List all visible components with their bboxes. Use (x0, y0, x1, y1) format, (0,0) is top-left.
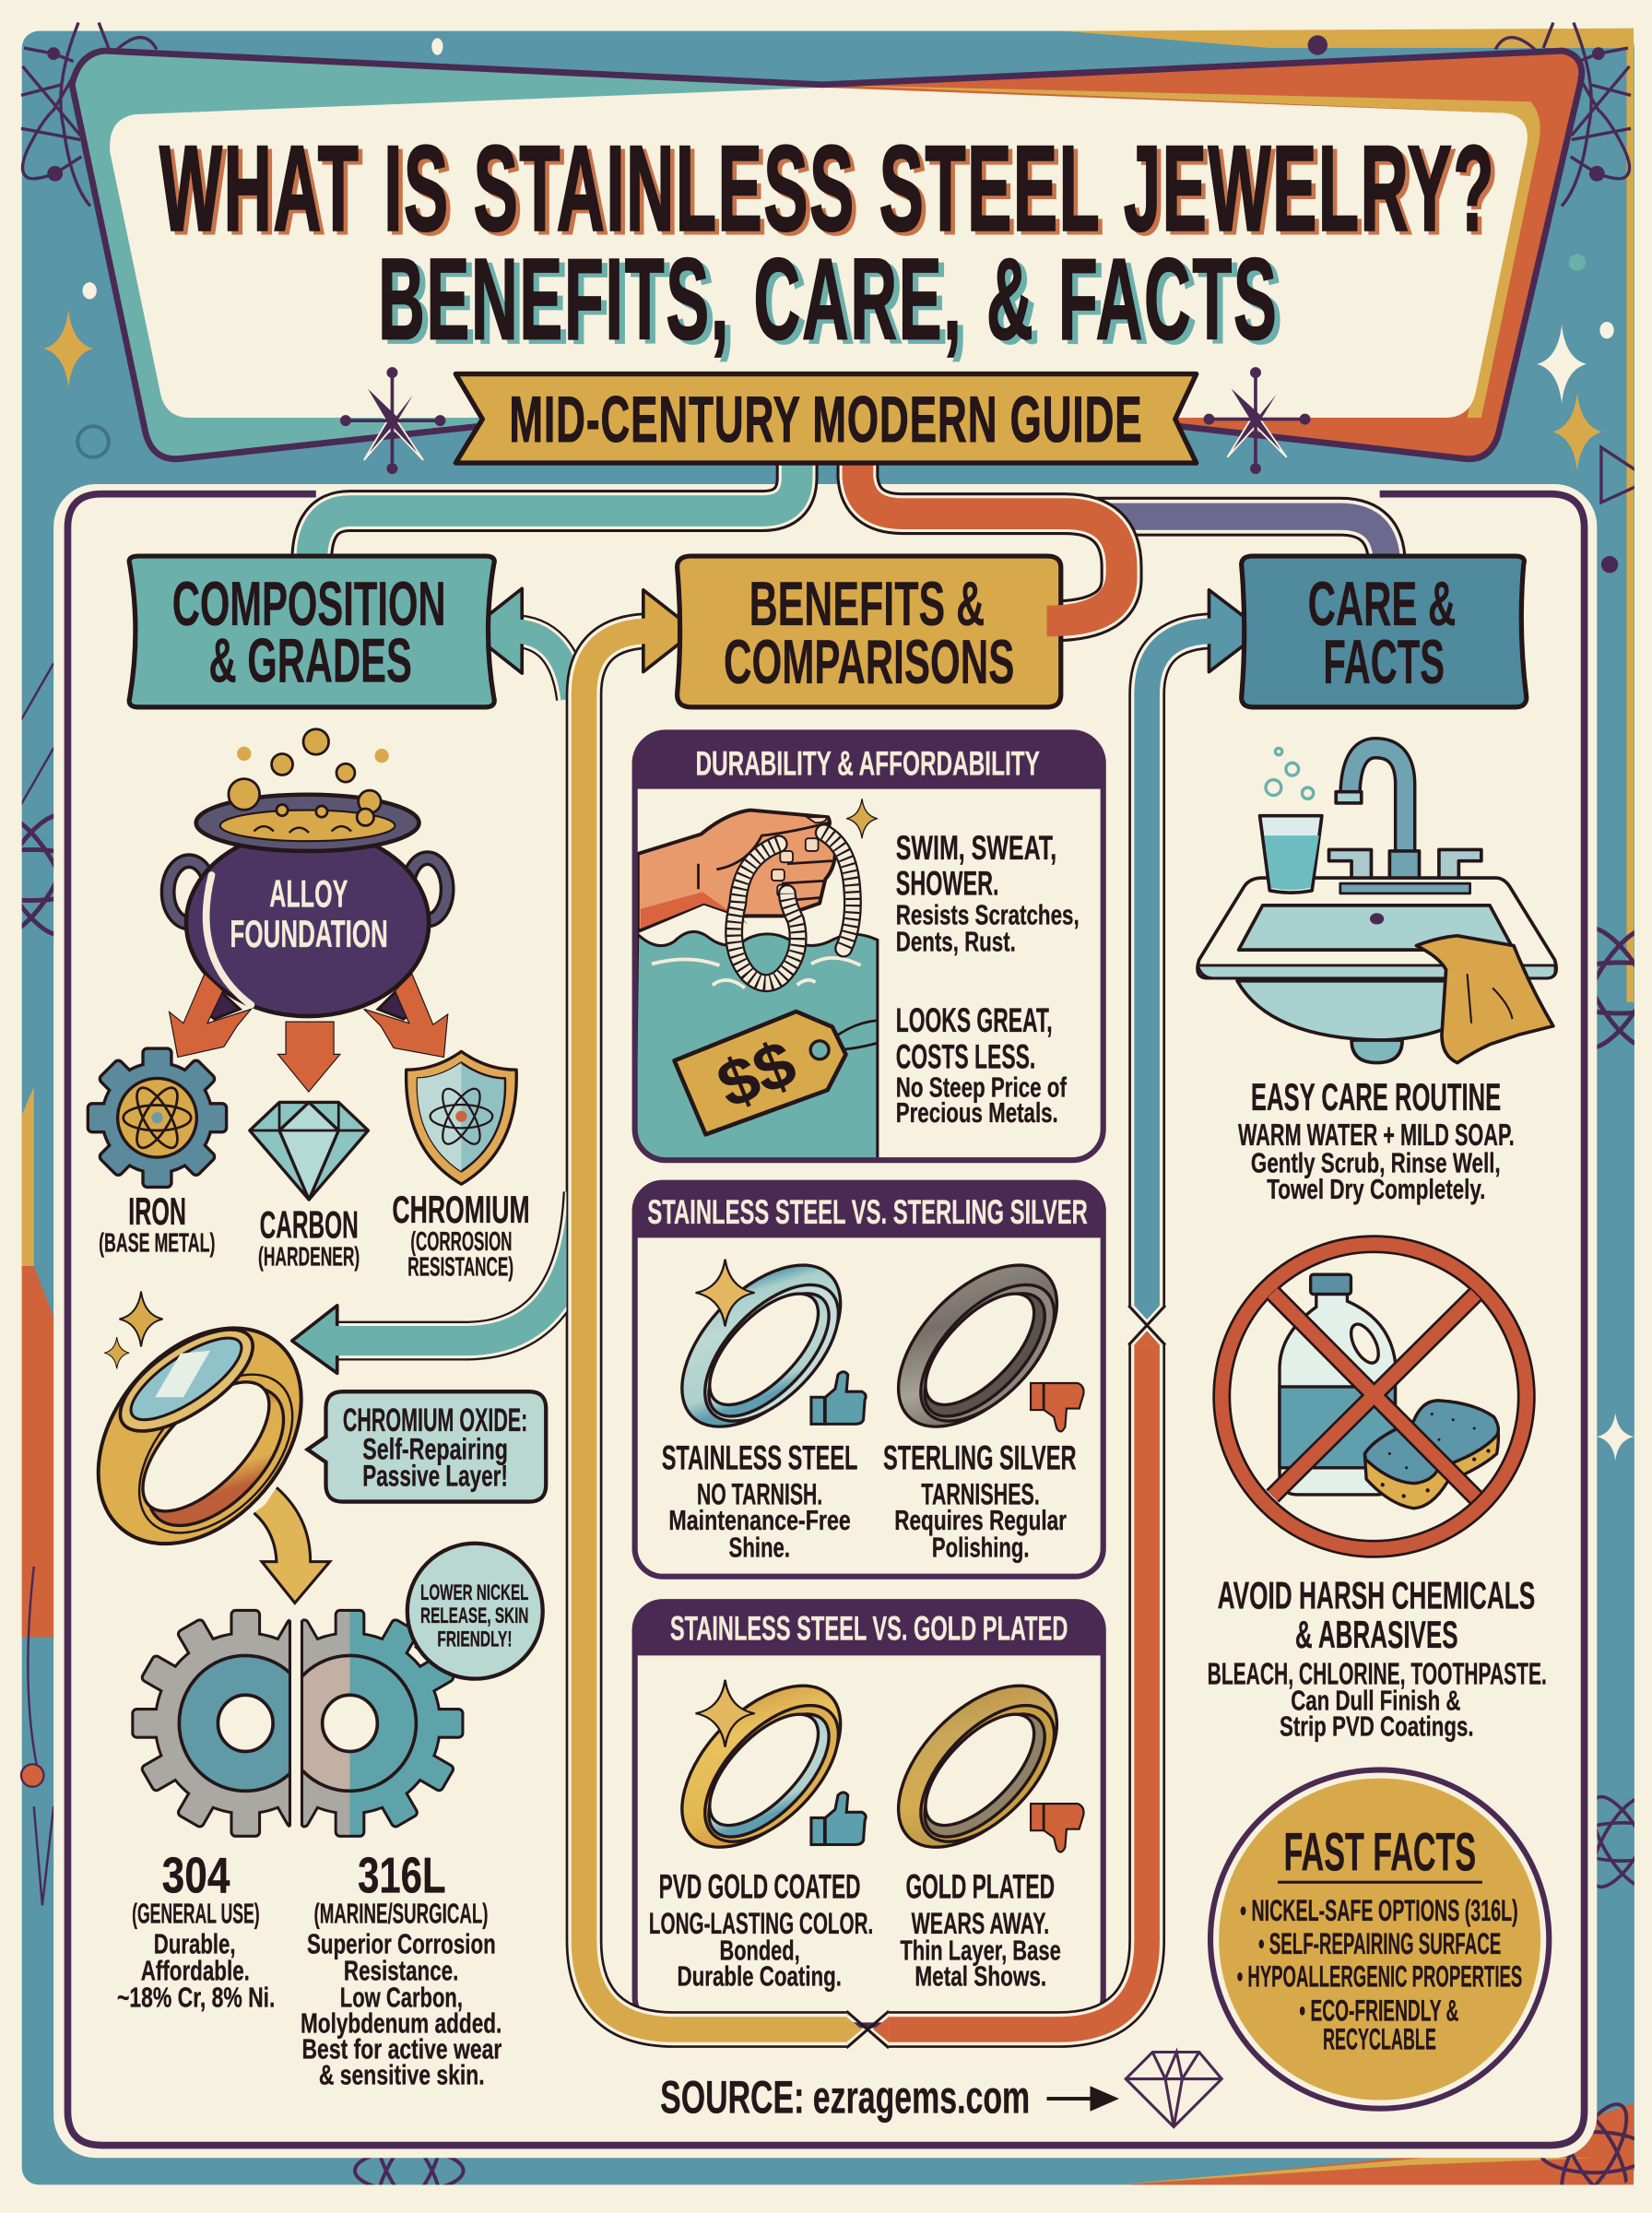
text: pvd gold column: Bonded, (719, 1935, 800, 1966)
label: carbon (258, 1203, 360, 1272)
badge: fast facts: RECYCLABLE (1323, 2022, 1436, 2055)
source line (660, 2053, 1221, 2127)
bleach bottle (1280, 1274, 1395, 1495)
label: carbon: CARBON (260, 1203, 359, 1246)
icon: alloy cauldron: ALLOY (269, 872, 348, 915)
label: iron: (BASE METAL) (99, 1229, 215, 1259)
text: grade 316L: Best for active wear (301, 2034, 502, 2065)
text: avoid harsh chemicals: & ABRASIVES (1295, 1614, 1458, 1656)
text: avoid harsh chemicals: Strip PVD Coatings. (1280, 1711, 1474, 1743)
text: gold plated column: Thin Layer, Base (900, 1935, 1061, 1966)
arrow: teal to ring (292, 1192, 583, 1373)
badge: fast facts: FAST FACTS (1284, 1823, 1476, 1883)
text: easy care routine: EASY CARE ROUTINE (1251, 1076, 1501, 1118)
callout: chromium oxide: CHROMIUM OXIDE: (343, 1402, 527, 1438)
text: swim sweat shower: Resists Scratches, (896, 900, 1080, 931)
heading: care and facts: CARE & (1308, 570, 1456, 639)
panel header (635, 732, 1103, 789)
sink rim (1198, 878, 1556, 978)
text: grade 304 (117, 1847, 275, 2014)
icon: no harsh chemicals (1221, 1244, 1527, 1549)
text: grade 316L: Resistance. (344, 1955, 458, 1986)
text: gold plated column: Metal Shows. (914, 1961, 1046, 1993)
label: chromium (392, 1189, 530, 1283)
icon: iron gear (89, 1050, 225, 1186)
subtitle ribbon (455, 374, 1197, 463)
label: chromium: RESISTANCE) (407, 1253, 513, 1283)
callout: lower nickel release: LOWER NICKEL (420, 1580, 528, 1605)
text: looks great costs less: Precious Metals. (896, 1097, 1058, 1129)
icon: alloy cauldron: FOUNDATION (230, 913, 388, 955)
cauldron rim (196, 795, 419, 851)
text: pvd gold column: LONG-LASTING COLOR. (649, 1907, 873, 1940)
label: iron (99, 1190, 215, 1259)
text: swim sweat shower: Dents, Rust. (896, 927, 1016, 958)
cauldron body (186, 830, 429, 1016)
text: swim sweat shower (896, 829, 1080, 958)
icon: gold ring with oxide layer (57, 1288, 343, 1583)
arrow: gold main connector to benefits (584, 590, 862, 2042)
text: grade 316L: Superior Corrosion (307, 1928, 496, 1959)
text: looks great costs less: LOOKS GREAT, (896, 1001, 1053, 1039)
title text (159, 120, 1500, 368)
text: grade 316L: Molybdenum added. (301, 2008, 502, 2040)
prohibition sign (1221, 1244, 1527, 1549)
label: iron: IRON (128, 1190, 186, 1233)
arrow: blue connector to care header (1128, 590, 1263, 1345)
panel: durability and affordability (635, 732, 1103, 1160)
icon: 316L half gear (301, 1608, 465, 1838)
text: grade 304: Durable, (154, 1928, 236, 1959)
text: stainless steel column: Maintenance-Free (668, 1505, 851, 1536)
text: grade 316L: & sensitive skin. (319, 2060, 485, 2091)
heading: composition and grades: & GRADES (208, 626, 412, 695)
text: gold plated column: GOLD PLATED (905, 1868, 1055, 1906)
label: chromium: (CORROSION (410, 1227, 513, 1257)
panel border (635, 732, 1103, 1160)
text: stainless steel column: STAINLESS STEEL (662, 1438, 857, 1476)
text: grade 304: 304 (162, 1847, 230, 1904)
price tag (674, 1012, 878, 1134)
heading: benefits and comparisons: COMPARISONS (724, 628, 1014, 697)
callout: chromium oxide (308, 1391, 546, 1502)
soap bubbles (1266, 748, 1314, 799)
text: easy care routine (1238, 1076, 1515, 1205)
text: easy care routine: Gently Scrub, Rinse Well, (1251, 1147, 1501, 1178)
heading: composition and grades: COMPOSITION (172, 570, 446, 639)
callout: chromium oxide: Passive Layer! (362, 1460, 508, 1493)
text: gold plated column (900, 1868, 1061, 1993)
orange end over benefits box (1046, 572, 1122, 621)
text: sterling silver column: STERLING SILVER (883, 1438, 1077, 1476)
callout: lower nickel release (407, 1544, 543, 1679)
icon: chromium shield (407, 1051, 516, 1184)
text: grade 304: (GENERAL USE) (132, 1899, 260, 1930)
panel: stainless vs gold plated: STAINLESS STEEL VS. GOLD PLATED (670, 1610, 1068, 1648)
icon: steel ring (653, 1237, 869, 1455)
panel: stainless vs sterling silver (635, 1183, 1103, 1577)
arrow: ring to grades (254, 1487, 330, 1603)
text: grade 316L (301, 1847, 502, 2091)
panel: stainless vs gold plated (635, 1602, 1103, 2025)
text: sterling silver column: Polishing. (932, 1532, 1030, 1563)
heading: benefits and comparisons (678, 556, 1061, 707)
text: easy care routine: Towel Dry Completely. (1267, 1174, 1485, 1205)
icon: thumbs down (1031, 1804, 1084, 1852)
label: chromium: CHROMIUM (392, 1189, 530, 1231)
connector: orange to benefits (857, 460, 1122, 621)
heading: composition and grades (129, 556, 494, 707)
text: pvd gold column (649, 1868, 873, 1993)
hand (638, 811, 835, 931)
icon: worn gold ring (869, 1657, 1086, 1876)
icon: sparkle (846, 799, 878, 838)
water glass (1260, 816, 1322, 893)
text: pvd gold column: Durable Coating. (678, 1961, 842, 1993)
text: sterling silver column (883, 1438, 1077, 1563)
starburst ornaments (341, 368, 1310, 473)
panel: stainless vs sterling silver: STAINLESS STEEL VS. STERLING SILVER (647, 1193, 1088, 1231)
connector: purple to care and facts (1086, 516, 1386, 564)
towel (1416, 936, 1553, 1063)
badge: fast facts (1210, 1769, 1549, 2109)
text: looks great costs less: COSTS LESS. (896, 1038, 1035, 1076)
icon: 304 half gear (131, 1608, 291, 1838)
sponge (1364, 1401, 1498, 1509)
text: swim sweat shower: SHOWER. (896, 864, 998, 902)
text: pvd gold column: PVD GOLD COATED (659, 1868, 860, 1906)
icon: steel sparkle (696, 1260, 755, 1326)
source line: SOURCE: ezragems.com (660, 2070, 1030, 2123)
icon: thumbs up (811, 1793, 866, 1845)
heading: benefits and comparisons: BENEFITS & (749, 570, 985, 639)
icon: gold sparkle (696, 1680, 755, 1747)
faucet (1329, 748, 1481, 882)
basin bowl (1237, 981, 1509, 1040)
callout: lower nickel release: RELEASE, SKIN (420, 1604, 528, 1628)
text: sterling silver column: Requires Regular (894, 1505, 1067, 1536)
cauldron handles (168, 858, 447, 923)
icon: ring sparkles (104, 1292, 163, 1368)
callout: lower nickel release: FRIENDLY! (437, 1627, 513, 1651)
arrow: orange lower connector (846, 1331, 1160, 2048)
icon: carbon diamond (250, 1102, 368, 1200)
icon: thumbs down (1031, 1383, 1084, 1431)
connector: teal to composition (312, 460, 797, 562)
text: grade 316L: 316L (358, 1847, 446, 1904)
arrow: teal to composition header (468, 588, 572, 699)
heading: care and facts: FACTS (1323, 628, 1445, 697)
icon: alloy cauldron (168, 729, 447, 1019)
text: avoid harsh chemicals: Can Dull Finish & (1291, 1685, 1460, 1716)
label: carbon: (HARDENER) (258, 1242, 360, 1272)
text: swim sweat shower: SWIM, SWEAT, (896, 829, 1056, 867)
arrows: cauldron to elements (170, 974, 448, 1092)
text: gold plated column: WEARS AWAY. (912, 1907, 1049, 1940)
corner atoms (21, 22, 1631, 206)
text: avoid harsh chemicals (1208, 1575, 1547, 1743)
badge: fast facts: • ECO-FRIENDLY & (1299, 1994, 1458, 2027)
title banner frame (72, 51, 1582, 459)
text: sterling silver column: TARNISHES. (921, 1478, 1040, 1511)
icon: tarnished ring (869, 1237, 1086, 1455)
text: grade 316L: Low Carbon, (340, 1982, 463, 2014)
text: stainless steel column: Shine. (729, 1532, 790, 1563)
icon: pvd gold ring (653, 1657, 869, 1876)
chain (734, 833, 853, 983)
callout: chromium oxide: Self-Repairing (362, 1433, 508, 1466)
water (635, 931, 878, 1160)
heading: care and facts (1242, 556, 1527, 707)
icon: outline diamond (1126, 2053, 1221, 2127)
arrow: source to diamond (1046, 2089, 1115, 2109)
price tag: $$ (707, 1025, 806, 1122)
cauldron legs (202, 981, 418, 1019)
text: stainless steel column (662, 1438, 857, 1563)
main content panel (53, 484, 1597, 2158)
text: stainless steel column: NO TARNISH. (697, 1478, 822, 1511)
icon: thumbs up (811, 1372, 866, 1424)
bubbles (229, 729, 389, 825)
text: looks great costs less (896, 1001, 1068, 1129)
icon: sink (1198, 748, 1556, 1063)
text: looks great costs less: No Steep Price of (896, 1071, 1068, 1103)
text: grade 304: Affordable. (141, 1955, 250, 1986)
text: grade 316L: (MARINE/SURGICAL) (313, 1899, 488, 1930)
text: grade 304: ~18% Cr, 8% Ni. (117, 1982, 275, 2014)
panel title: DURABILITY & AFFORDABILITY (695, 744, 1040, 782)
subtitle ribbon: MID-CENTURY MODERN GUIDE (509, 383, 1143, 456)
